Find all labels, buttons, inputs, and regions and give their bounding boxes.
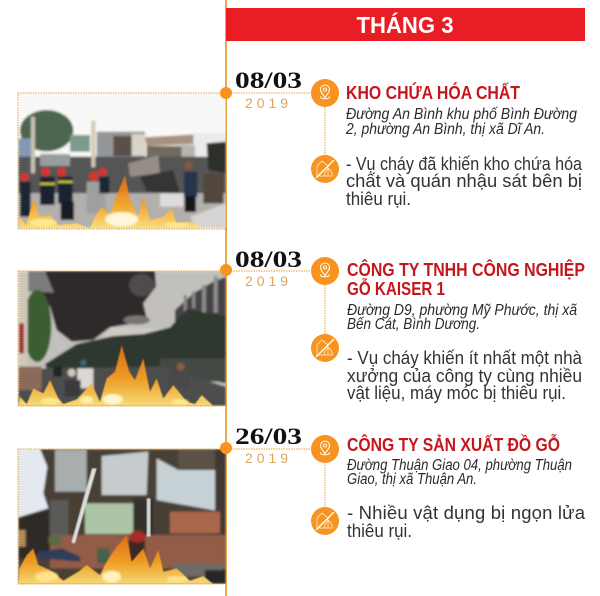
icon: location pin 3	[311, 435, 339, 463]
entry 3 text: - Nhiều vật dụng bị ngọn lửa	[347, 502, 586, 523]
banner: tháng 3	[226, 8, 585, 41]
timeline dot 3	[220, 442, 232, 454]
icon: location pin 1	[311, 79, 339, 107]
photo: firefighters at chemical warehouse	[18, 93, 226, 228]
entry 2 text: vật liệu, máy móc bị thiêu rụi.	[347, 382, 566, 403]
entry 3 text: CÔNG TY SẢN XUẤT ĐỒ GỖ	[347, 434, 560, 455]
icon: burned house 1	[311, 155, 339, 183]
date 08/03 second: 08/03	[235, 247, 302, 272]
entry 1 text: thiêu rụi.	[346, 188, 411, 209]
photo: black smoke over Kaiser factory	[18, 271, 226, 406]
date 26/03: 2019	[245, 450, 288, 466]
entry 2 text	[347, 259, 585, 403]
date 26/03	[235, 424, 302, 466]
connector: entry 1	[226, 93, 325, 156]
entry 1 text: Đường An Bình khu phố Bình Đường	[346, 106, 577, 123]
entry 3 text	[347, 434, 586, 541]
entry 1 text: 2, phường An Bình, thị xã Dĩ An.	[345, 121, 545, 138]
icon: burned house 2	[311, 334, 339, 362]
entry 1 text: KHO CHỨA HÓA CHẤT	[346, 82, 520, 103]
date 08/03: 08/03	[235, 68, 302, 93]
entry 3 text: Giao, thị xã Thuận An.	[347, 471, 477, 488]
entry 1 text	[345, 82, 583, 209]
entry 2 text: GỖ KAISER 1	[347, 278, 445, 299]
date 08/03 second	[235, 247, 302, 289]
photo frame 1	[18, 93, 226, 229]
entry 2 text: Đường D9, phường Mỹ Phước, thị xã	[347, 302, 577, 319]
connector: entry 2	[226, 271, 325, 335]
timeline dot 2	[220, 264, 232, 276]
banner: tháng 3: THÁNG 3	[356, 11, 454, 38]
entry 2 text: xưởng của công ty cùng nhiều	[347, 365, 582, 386]
icon: location pin 2	[311, 257, 339, 285]
photo: fire at wood company	[18, 449, 226, 584]
date 26/03: 26/03	[235, 424, 302, 449]
entry 2 text: - Vụ cháy khiến ít nhất một nhà	[347, 347, 583, 368]
timeline axis	[225, 0, 227, 596]
photo frame 2	[18, 271, 226, 406]
icon: burned house 3	[311, 507, 339, 535]
photo frame 3	[18, 449, 226, 584]
entry 2 text: Bến Cát, Bình Dương.	[347, 316, 480, 333]
entry 3 text: thiêu rụi.	[347, 520, 412, 541]
date 08/03: 2019	[245, 95, 288, 111]
entry 1 text: chất và quán nhậu sát bên bị	[346, 170, 582, 191]
date 08/03	[235, 68, 302, 111]
timeline dot 1	[220, 87, 232, 99]
date 08/03 second: 2019	[245, 273, 288, 289]
connector: entry 3	[226, 449, 325, 508]
